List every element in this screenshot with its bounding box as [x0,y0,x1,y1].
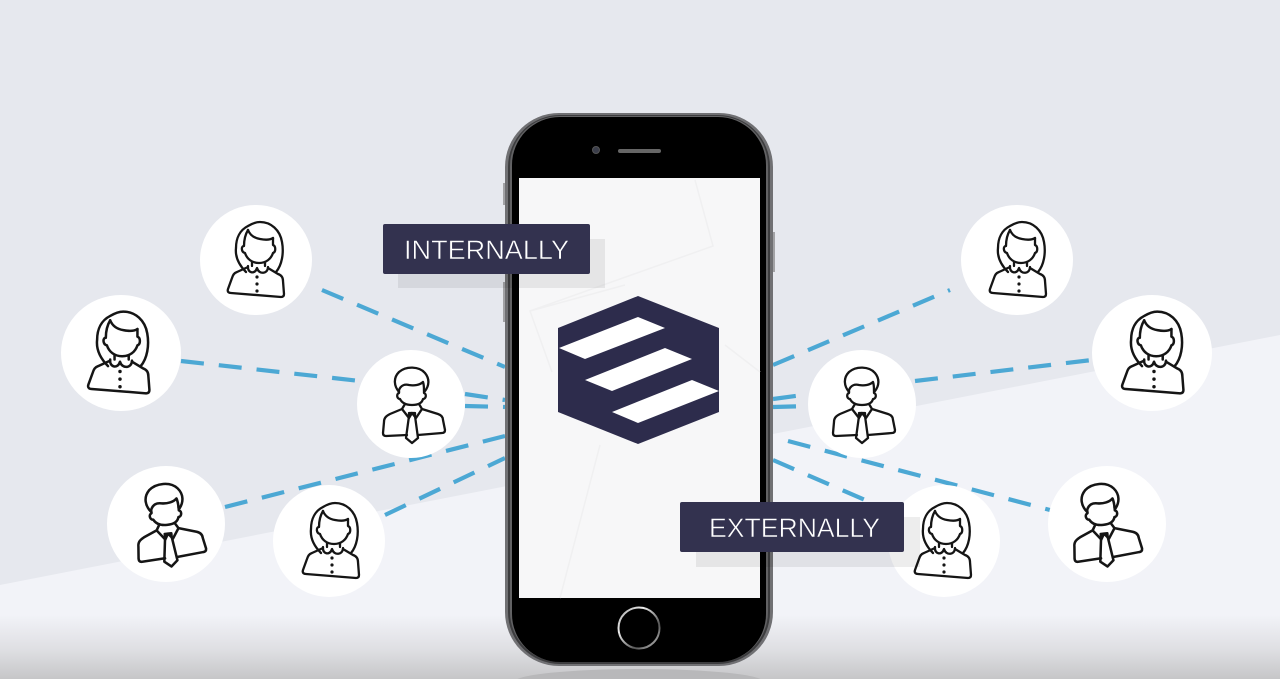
phone screen [519,178,760,598]
person circle: woman bottom left [273,485,385,597]
label: internally [383,224,605,288]
phone body [505,113,773,666]
person circle: man centre left [357,350,465,458]
person circle: woman upper left [200,205,312,315]
label: externally: EXTERNALLY [709,513,880,543]
phone floor shadow [514,669,764,679]
speaker [618,149,661,153]
side buttons [503,183,775,322]
person circle: woman far left [61,295,181,411]
person circle: man centre right [808,350,916,458]
dashed connection lines [181,290,1092,515]
smartphone [503,113,775,666]
label: externally [680,502,920,567]
person circle: woman upper right [961,205,1073,315]
person circle: woman bottom right [888,485,1000,597]
person circle: man lower left [107,466,225,582]
person circle: man lower right [1048,466,1166,582]
hexagon logo [558,296,719,444]
home button [618,608,660,648]
label: internally: INTERNALLY [404,235,569,265]
person circle: woman far right [1092,295,1212,411]
camera [592,146,600,154]
